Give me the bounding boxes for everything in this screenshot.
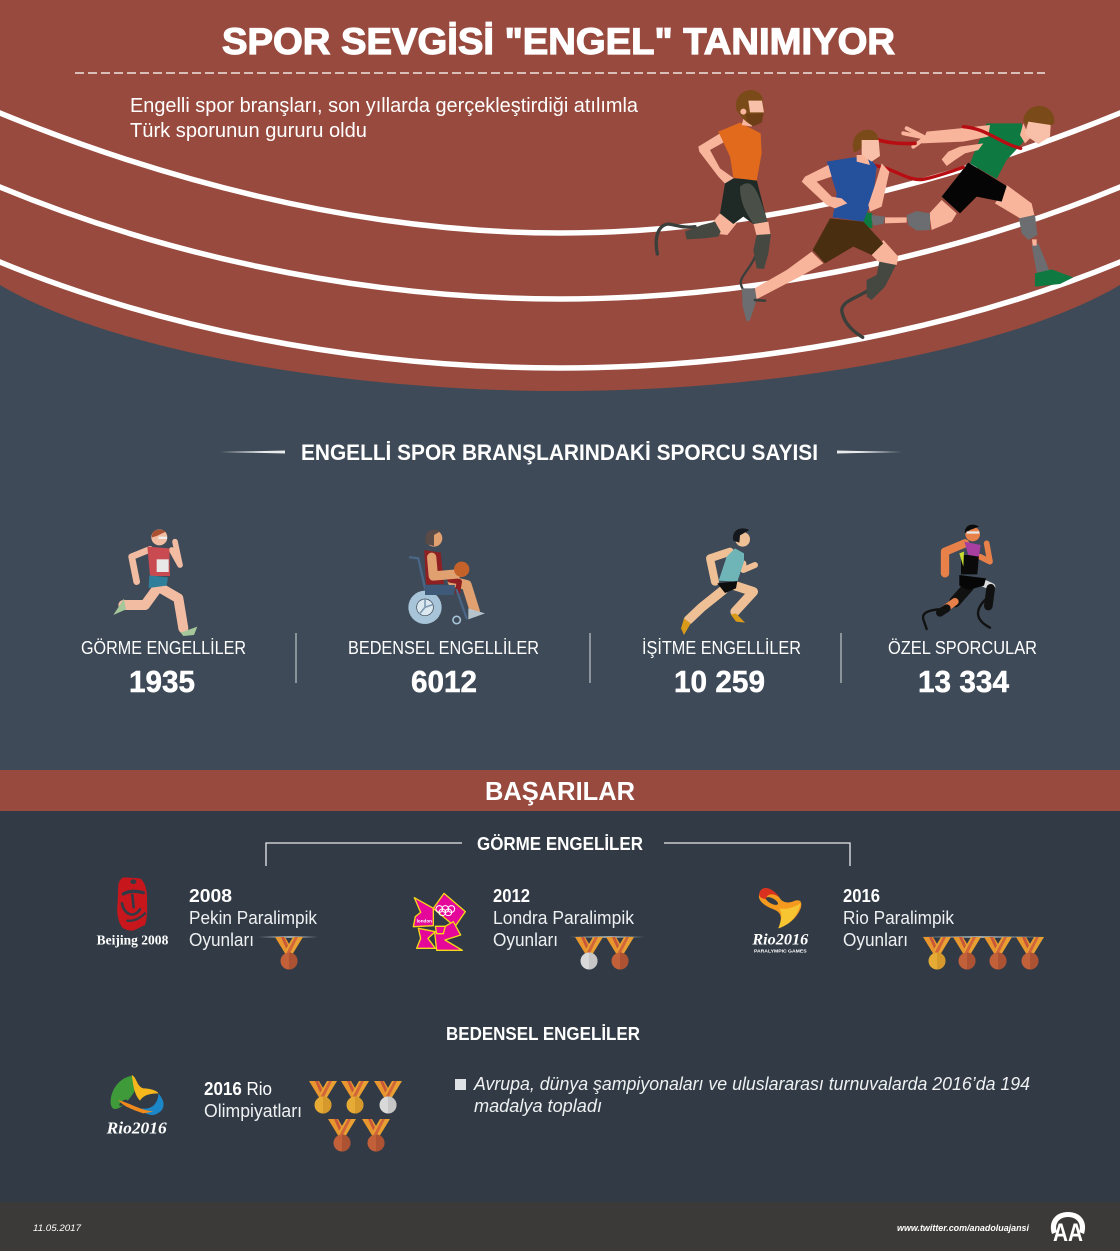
footer bar: 11.05.2017 [33,1223,82,1234]
stat: Görme Engelliler [81,638,246,699]
runner: green shirt, finishing tape [863,106,1073,287]
icon: Anadolu Agency logo [1051,1212,1085,1247]
bullet note: Avrupa, dünya şampiyonaları ve uluslararası turnuvalarda 2016’da 194 [473,1074,1030,1094]
medals: 2012 [569,936,645,970]
icon: Rio 2016 Olympic logo [106,1075,167,1137]
heading band: Başarılar [0,770,1120,811]
subheading with bracket: Görme Engeliler [266,834,850,866]
stat: İşitme Engelliler: 10 259 [674,664,765,699]
subheading with bracket: Görme Engeliler: GÖRME ENGELİLER [477,834,643,854]
icon: Rio 2016 Olympic logo: Rio2016 [106,1118,167,1137]
runner: blue shirt [742,130,898,337]
icon: Rio 2016 Paralympic logo: PARALYMPIC GAMES [754,948,807,954]
entry: 2012 Londra: 2012 [493,886,530,906]
footer bar [0,1202,1120,1251]
heading band: Başarılar: BAŞARILAR [485,776,635,806]
entry: 2016 Rio Olympics [204,1079,302,1121]
icon: Anadolu Agency logo: AA [1053,1219,1083,1247]
icon: London 2012 logo [413,893,465,950]
stat: Bedensel Engelliler: 6012 [411,664,477,699]
entry: 2008 Pekin: 2008 [189,886,232,906]
illustration: three para-athlete runners [656,90,1073,337]
footer bar: www.twitter.com/anadoluajansi [897,1223,1029,1234]
icon: Rio 2016 Paralympic logo: Rio2016 [751,931,808,948]
entry: 2016 Rio Paralympics: Oyunları [843,930,908,950]
entry: 2012 Londra: Londra Paralimpik [493,908,635,928]
stat: İşitme Engelliler: İŞİTME ENGELLİLER [642,638,801,658]
stat: Özel Sporcular [888,638,1037,699]
icon: wheelchair athlete [410,530,485,624]
entry: 2012 Londra [493,886,635,950]
medals: 2008 [258,936,318,970]
panel: achievements background [0,811,1120,1202]
subheading: Bedensel Engeliler: BEDENSEL ENGELİLER [446,1024,640,1044]
icon: blade runner special athlete [923,525,992,629]
panel: running track header [0,0,1120,391]
icon: hearing impaired runner [681,528,755,635]
runner: orange shirt [656,90,771,297]
entry: 2016 Rio Olympics: 2016 Rio [204,1079,272,1099]
stat: Bedensel Engelliler [348,638,539,699]
subtitle text: Türk sporunun gururu oldu [130,120,367,142]
icon: London 2012 logo: london [417,919,432,925]
icon: visually impaired runner [113,529,197,636]
stat: İşitme Engelliler [642,638,801,699]
stat: Görme Engelliler: GÖRME ENGELLİLER [81,638,246,658]
bullet note: madalya topladı [474,1096,602,1116]
entry: 2012 Londra: Oyunları [493,930,558,950]
icon: Rio 2016 Paralympic logo [751,888,808,954]
stat: Özel Sporcular: ÖZEL SPORCULAR [888,638,1037,658]
icon: Beijing 2008 logo: Beijing 2008 [97,933,168,948]
stat: Görme Engelliler: 1935 [129,664,195,699]
subtitle text [130,95,639,142]
entry: 2016 Rio Paralympics: 2016 [843,886,880,906]
bullet note [455,1074,1030,1116]
entry: 2016 Rio Olympics: Olimpiyatları [204,1101,302,1121]
section heading: athlete counts: ENGELLİ SPOR BRANŞLARINDAKİ SPORCU SAYISI [301,440,818,465]
entry: 2008 Pekin: Oyunları [189,930,254,950]
icon: Beijing 2008 logo [97,877,168,948]
medals: 2016 Paralympics [920,936,1045,970]
entry: 2016 Rio Paralympics [843,886,955,950]
title: SPOR SEVGİSİ "ENGEL" TANIMIYOR [222,21,895,62]
subtitle text: Engelli spor branşları, son yıllarda gerçekleştirdiği atılımla [130,95,639,117]
stat: Bedensel Engelliler: BEDENSEL ENGELLİLER [348,638,539,658]
stat: Özel Sporcular: 13 334 [918,664,1010,699]
entry: 2008 Pekin [189,886,318,950]
entry: 2008 Pekin: Pekin Paralimpik [189,908,318,928]
medals: 2016 Olympics [309,1081,402,1152]
entry: 2016 Rio Paralympics: Rio Paralimpik [843,908,955,928]
